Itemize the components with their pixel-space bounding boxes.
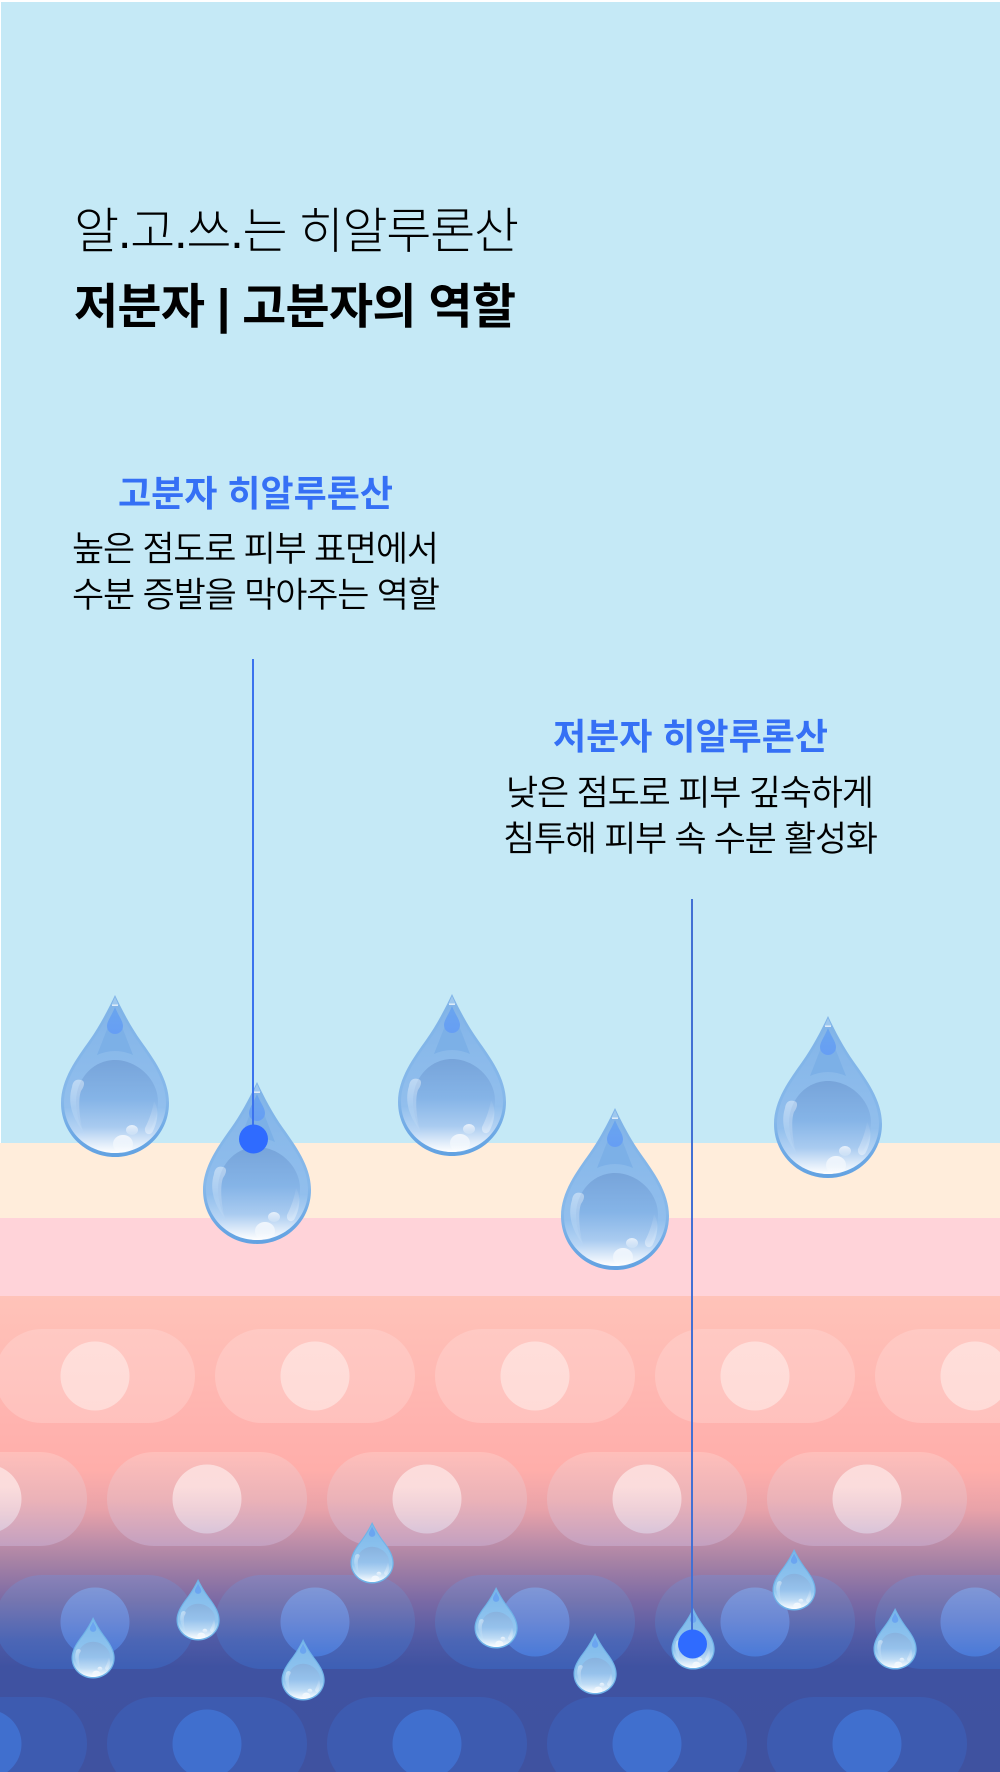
icon: small water drop 3 bbox=[350, 1522, 394, 1584]
icon: small water drop 8 bbox=[772, 1549, 816, 1611]
pointer: low molecular line and dot bbox=[678, 899, 707, 1658]
callout: low molecular hyaluronic acid: 침투해 피부 속 수분 활성화 bbox=[503, 820, 878, 859]
skin layer: pink bbox=[0, 1218, 1000, 1296]
callout: high molecular hyaluronic acid bbox=[72, 473, 440, 615]
title: 저분자 | 고분자의 역할 bbox=[74, 281, 516, 334]
background: sky panel bbox=[1, 2, 1000, 1143]
icon: large water drop 3 bbox=[398, 994, 506, 1156]
icon: small water drop 4 bbox=[282, 1639, 325, 1701]
icon: small water drop 5 bbox=[474, 1587, 518, 1649]
icon: large water drop 5 bbox=[774, 1016, 882, 1178]
icon: small water drop 1 bbox=[72, 1617, 115, 1679]
skin layer: gradient dermis bbox=[0, 1296, 1000, 1772]
icon: small water drop 7 bbox=[672, 1608, 715, 1670]
icon: small water drop 2 bbox=[176, 1579, 220, 1641]
callout: low molecular hyaluronic acid: 낮은 점도로 피부 깊숙하게 bbox=[506, 774, 874, 813]
callout: high molecular hyaluronic acid: 높은 점도로 피부 표면에서 bbox=[72, 530, 439, 569]
skin layer: cream bbox=[0, 1143, 1000, 1218]
icon: large water drop 2 bbox=[203, 1082, 311, 1244]
icon: large water drop 4 bbox=[561, 1108, 669, 1270]
icon: small water drop 6 bbox=[574, 1633, 617, 1695]
title bbox=[74, 205, 519, 334]
title: 알.고.쓰.는 히알루론산 bbox=[74, 205, 519, 259]
callout: high molecular hyaluronic acid: 수분 증발을 막아주는 역할 bbox=[72, 576, 440, 615]
icon: small water drop 9 bbox=[874, 1608, 917, 1670]
callout: low molecular hyaluronic acid: 저분자 히알루론산 bbox=[553, 716, 828, 757]
callout: low molecular hyaluronic acid bbox=[503, 716, 878, 859]
pointer: high molecular line and dot bbox=[239, 659, 268, 1154]
skin cell nuclei bbox=[0, 1342, 1000, 1772]
callout: high molecular hyaluronic acid: 고분자 히알루론산 bbox=[118, 473, 393, 514]
skin cell capsules bbox=[0, 1329, 1000, 1772]
icon: large water drop 1 bbox=[61, 995, 169, 1157]
